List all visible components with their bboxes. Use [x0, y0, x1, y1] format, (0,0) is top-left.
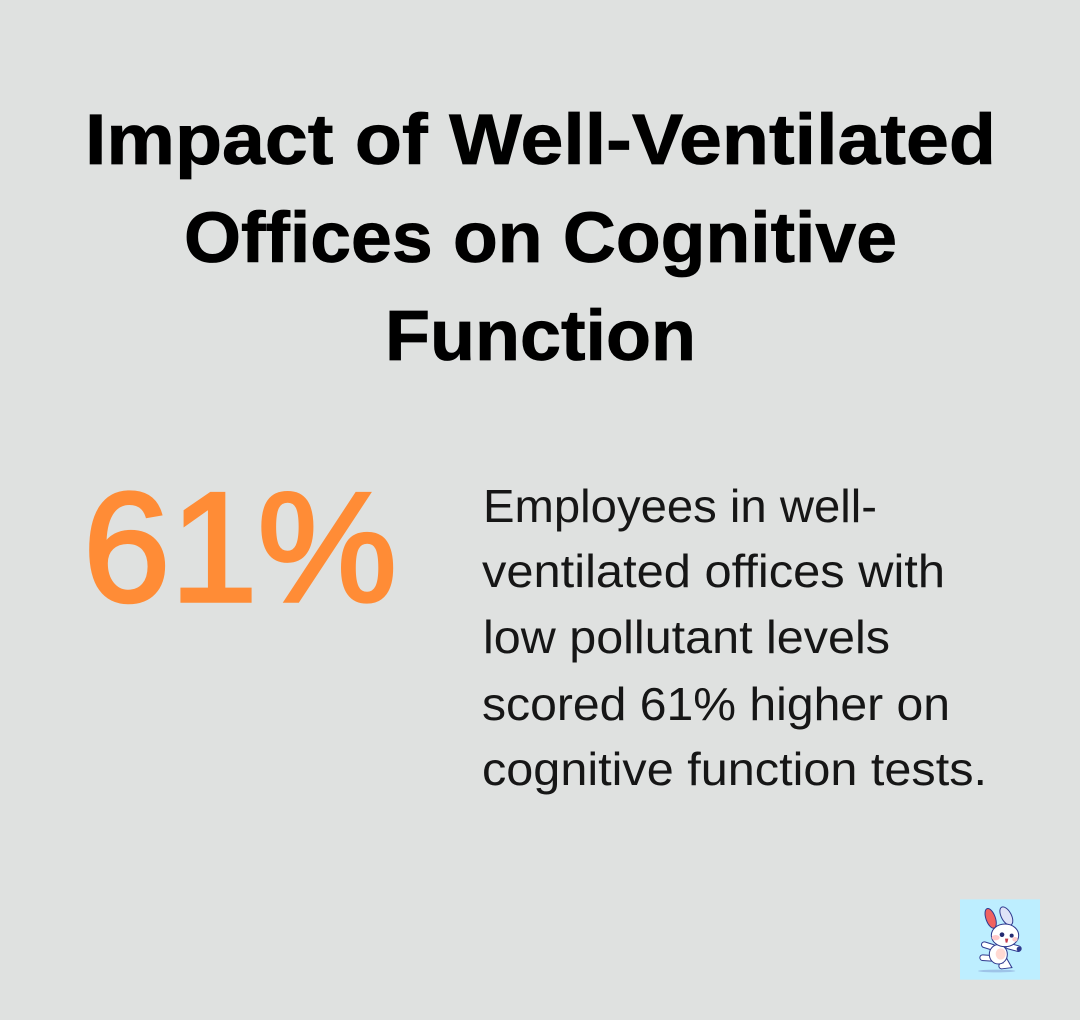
- description text: low pollutant levels: [483, 611, 890, 663]
- description text: [482, 480, 987, 795]
- title: Offices on Cognitive: [184, 199, 897, 278]
- big stat: 61%: 61%: [83, 461, 397, 635]
- description text: scored 61% higher on: [482, 678, 950, 730]
- description text: Employees in well-: [483, 480, 877, 532]
- title: Function: [385, 297, 696, 376]
- title: [85, 101, 996, 376]
- description text: ventilated offices with: [482, 545, 945, 597]
- description text: cognitive function tests.: [482, 743, 987, 795]
- title: Impact of Well-Ventilated: [85, 101, 996, 180]
- icon: rabbit logo: [960, 899, 1040, 980]
